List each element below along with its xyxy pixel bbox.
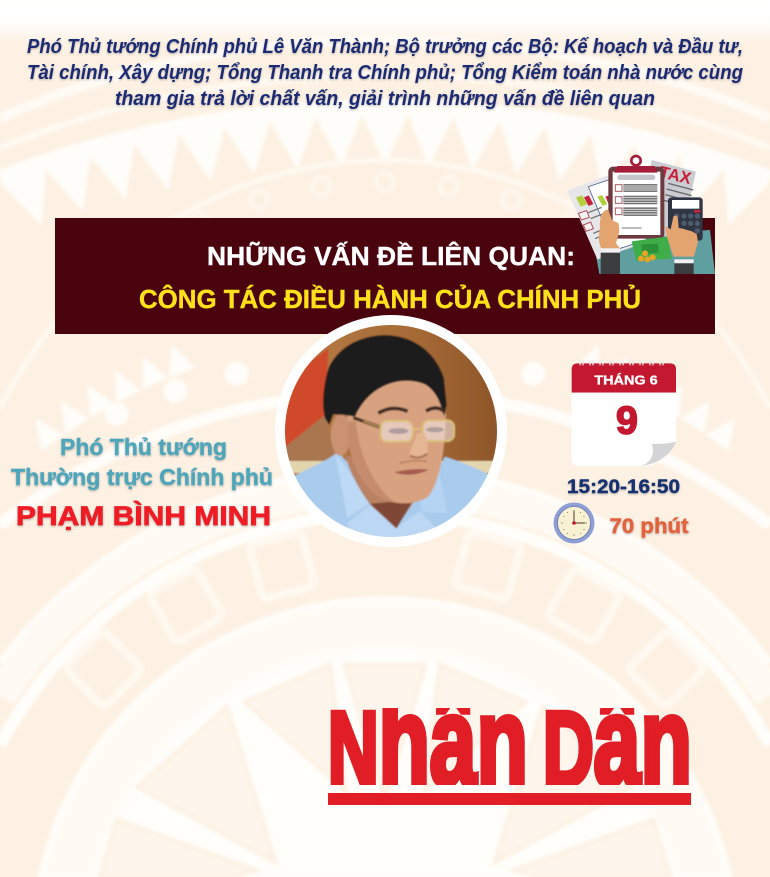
icon: calendar with date xyxy=(572,360,676,466)
role label: Phó Thủ tướng xyxy=(60,434,227,460)
banner: topic heading xyxy=(55,218,715,334)
duration: 70 phút xyxy=(610,515,689,538)
name label: PHẠM BÌNH MINH xyxy=(16,500,271,531)
icon: clock xyxy=(554,502,594,544)
logo: Nhân Dân: Nhân xyxy=(328,671,528,812)
calendar month: THÁNG 6 xyxy=(594,372,658,387)
icon: clipboard, tax papers and calculator xyxy=(567,156,715,274)
icon label: TAX: TAX xyxy=(658,162,693,188)
banner line 1: NHỮNG VẤN ĐỀ LIÊN QUAN: xyxy=(207,241,575,271)
logo: Nhân Dân: Dân xyxy=(543,671,692,812)
portrait: Phạm Bình Minh xyxy=(275,315,507,548)
calendar day: 9 xyxy=(616,398,638,442)
role label: Thường trực Chính phủ xyxy=(11,464,273,490)
banner line 2: CÔNG TÁC ĐIỀU HÀNH CỦA CHÍNH PHỦ xyxy=(139,283,641,314)
time range: 15:20-16:50 xyxy=(567,476,680,498)
role label xyxy=(11,434,273,490)
intro text: participants xyxy=(27,36,743,110)
logo: Nhân Dân xyxy=(328,708,691,805)
intro text: participants: tham gia trả lời chất vấn, giải trình những vấn đề liên quan xyxy=(115,88,655,110)
